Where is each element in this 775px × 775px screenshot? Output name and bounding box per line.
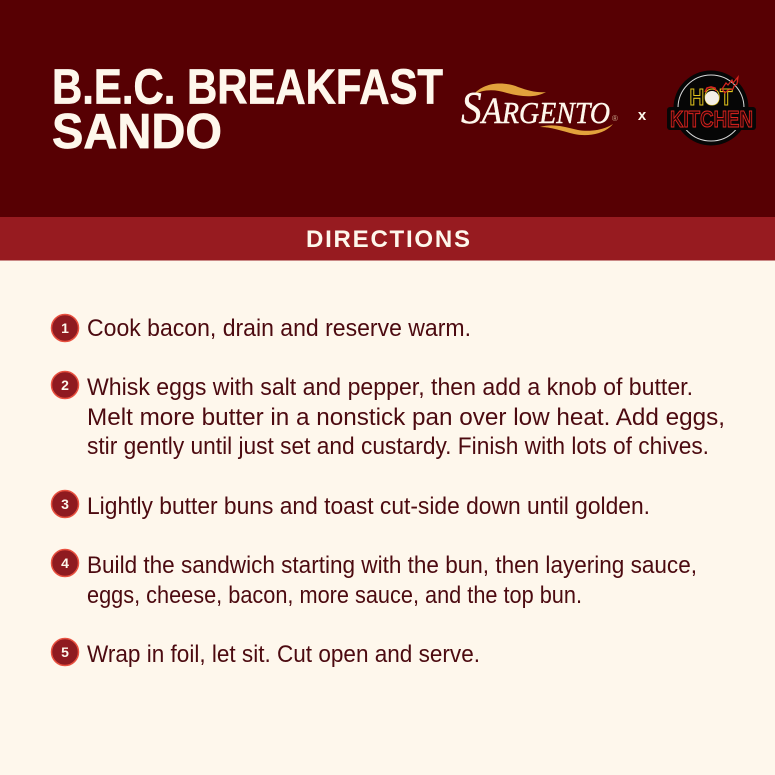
logo: Hot Kitchen: KITCHEN: [670, 106, 753, 132]
directions band: [0, 217, 775, 260]
step 1: 1: [61, 320, 69, 336]
step 5: 5: [61, 644, 69, 660]
step 1: Cook bacon, drain and reserve warm.: [87, 315, 471, 342]
logo: Sargento: ®: [612, 114, 618, 123]
step 2: Whisk eggs with salt and pepper, then add a knob of butter.: [87, 374, 693, 401]
step 2: stir gently until just set and custardy. Finish with lots of chives.: [87, 433, 709, 460]
step 4: [52, 550, 697, 609]
step 2: Melt more butter in a nonstick pan over low heat. Add eggs,: [87, 404, 725, 431]
logo: Hot Kitchen: HOT: [690, 84, 732, 110]
title: B.E.C. BREAKFAST: [52, 60, 443, 114]
logo: Hot Kitchen: [667, 70, 756, 146]
header panel: [0, 0, 775, 217]
step 5: Wrap in foil, let sit. Cut open and serve.: [87, 641, 480, 668]
step 3: Lightly butter buns and toast cut-side down until golden.: [87, 493, 650, 520]
step 4: eggs, cheese, bacon, more sauce, and the top bun.: [87, 582, 582, 609]
logo: Sargento: SARGENTO: [461, 82, 610, 133]
step 2: [52, 372, 725, 460]
multiplication x: x: [638, 107, 647, 124]
step 4: Build the sandwich starting with the bun, then layering sauce,: [87, 552, 697, 579]
title: SANDO: [52, 105, 222, 159]
directions heading: DIRECTIONS: [306, 226, 470, 253]
title: [52, 60, 443, 159]
step 2: 2: [61, 377, 69, 393]
step 3: 3: [61, 496, 69, 512]
step 4: 4: [61, 555, 69, 571]
